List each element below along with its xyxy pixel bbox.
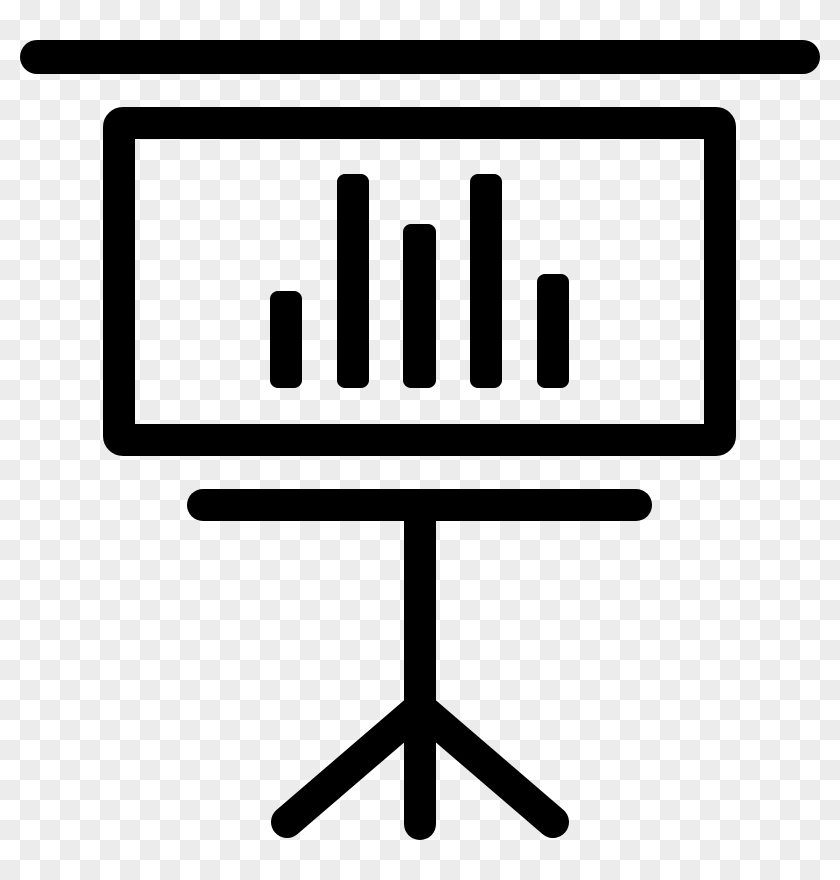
stand crossbar bbox=[203, 489, 636, 521]
top bar bbox=[37, 40, 803, 74]
screen frame bbox=[119, 123, 720, 440]
bar chart bbox=[270, 174, 569, 388]
stand pole and legs bbox=[287, 515, 553, 824]
